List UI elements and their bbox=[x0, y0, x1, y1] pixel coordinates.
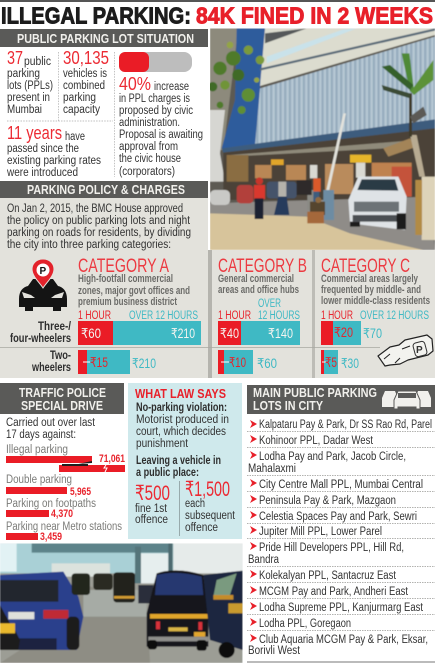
fine: 1,500 rupees subsequent offence: subsequent bbox=[185, 510, 236, 522]
bar: double parking 5,965: Double parking bbox=[6, 474, 72, 486]
black auto-rickshaw bbox=[147, 570, 208, 651]
stat: 11 years: were introduced bbox=[6, 167, 78, 179]
blue suv bbox=[0, 572, 83, 650]
policy intro text: parking on roads for residents, by dividing bbox=[7, 227, 191, 239]
stat: 11 years: passed since the bbox=[7, 143, 79, 155]
leaving a vehicle text bbox=[136, 455, 221, 479]
stat: 37 public parking lots: 37 bbox=[7, 48, 23, 68]
stat: 40 percent increase: the civic house bbox=[119, 153, 181, 165]
fine: 1,500 rupees subsequent offence: ₹1,500 bbox=[185, 478, 230, 501]
category a: zones, major govt offices and bbox=[78, 285, 190, 297]
fine: 500 rupees first offence: ₹500 bbox=[135, 482, 170, 505]
bar: category c three/four-wheelers: ₹20 bbox=[334, 325, 353, 340]
stat: 40 percent increase: proposed by civic bbox=[119, 105, 193, 117]
drive intro text: Carried out over last bbox=[6, 417, 96, 429]
row label: three-/four-wheelers: Three-/ bbox=[38, 321, 72, 333]
row label: three-/four-wheelers: four-wheelers bbox=[10, 333, 71, 345]
stat: 40 percent increase bbox=[119, 74, 203, 178]
row label: two-wheelers: wheelers bbox=[31, 362, 71, 374]
bar: illegal parking 71,061 bbox=[6, 444, 125, 472]
row label: three-/four-wheelers bbox=[10, 321, 72, 345]
leaving a vehicle text: a public place: bbox=[136, 467, 199, 479]
panel: public parking lot situation bbox=[0, 29, 208, 181]
policy intro text: the policy on public parking lots and night bbox=[7, 215, 191, 227]
category a: 1 HOUR bbox=[78, 310, 111, 322]
icon: hand holding parking ticket: P bbox=[416, 345, 423, 356]
list of parking lots: Peninsula Pay & Park, Mazgaon bbox=[259, 495, 396, 507]
bar: parking on footpaths 4,370: 4,370 bbox=[51, 508, 73, 520]
category a: OVER 12 HOURS bbox=[129, 310, 198, 322]
category b bbox=[218, 256, 307, 374]
list of parking lots: Pride Hill Developers PPL, Hill Rd, bbox=[259, 542, 404, 554]
category b: 1 HOUR bbox=[218, 310, 251, 322]
fine: 500 rupees first offence: offence bbox=[135, 514, 168, 526]
list of parking lots: Borivli West bbox=[248, 645, 301, 657]
no-parking violation text: punishment bbox=[136, 438, 189, 450]
bar: category b two-wheelers: ₹60 bbox=[257, 356, 277, 371]
heading: main public parking lots in city: MAIN PUBLIC PARKING bbox=[253, 385, 377, 400]
bar: category c three/four-wheelers bbox=[321, 321, 382, 345]
no-parking violation text: court, which decides bbox=[136, 426, 226, 438]
panel: parking policy and charges bbox=[0, 181, 435, 663]
fine: 1,500 rupees subsequent offence bbox=[185, 478, 236, 534]
icon: three cars bbox=[382, 391, 431, 409]
leaving a vehicle text: Leaving a vehicle in bbox=[136, 455, 221, 467]
drive intro text: 17 days against: bbox=[6, 429, 76, 441]
bar: parking near metro stations 3,459: Parking near Metro stations bbox=[6, 521, 122, 533]
category b: General commercial bbox=[218, 273, 294, 285]
category a: premium business district bbox=[78, 296, 177, 308]
bar: category c two-wheelers: ₹5 bbox=[325, 355, 337, 370]
stat: 11 years: existing parking rates bbox=[7, 155, 101, 167]
bar: illegal parking 71,061: 71,061 bbox=[99, 453, 125, 465]
title bbox=[1, 2, 433, 28]
stat: 30,135 vehicles capacity: capacity bbox=[63, 104, 100, 116]
stat: 40 percent increase: increase bbox=[154, 81, 189, 93]
fine: 500 rupees first offence: fine 1st bbox=[135, 503, 168, 515]
heading: main public parking lots in city: LOTS IN CITY bbox=[253, 398, 323, 413]
progress bar: 40 percent bbox=[119, 52, 192, 72]
parked motorbikes bbox=[210, 180, 312, 205]
bar: category c three/four-wheelers: ₹70 bbox=[363, 326, 382, 341]
stat: 40 percent increase: approval from bbox=[119, 141, 178, 153]
stat: 37 public parking lots bbox=[7, 48, 53, 116]
heading: parking policy and charges: PARKING POLICY & CHARGES bbox=[27, 182, 185, 197]
list of parking lots: MCGM Pay and Park, Andheri East bbox=[259, 586, 409, 598]
stat: 11 years bbox=[6, 123, 101, 179]
fine: 1,500 rupees subsequent offence: offence bbox=[185, 522, 218, 534]
white suv bbox=[348, 177, 407, 230]
bar: parking on footpaths 4,370: Parking on footpaths bbox=[6, 498, 96, 510]
stat: 40 percent increase: (corporators) bbox=[119, 166, 175, 178]
category b: 12 HOURS bbox=[258, 310, 300, 322]
list of parking lots: Lodha Pay and Park, Jacob Circle, bbox=[259, 451, 406, 463]
stat: 30,135 vehicles capacity: 30,135 bbox=[63, 48, 109, 68]
heading: traffic police special drive: SPECIAL DRIVE bbox=[21, 398, 103, 413]
stat: 37 public parking lots: public bbox=[24, 56, 51, 68]
category b: areas and office hubs bbox=[218, 284, 299, 296]
fine: 1,500 rupees subsequent offence: each bbox=[185, 498, 205, 510]
stat: 37 public parking lots: lots (PPLs) bbox=[7, 80, 53, 92]
stat: 30,135 vehicles capacity: vehicles is bbox=[63, 68, 107, 80]
bar: category c two-wheelers bbox=[321, 350, 359, 374]
bar: parking near metro stations 3,459 bbox=[6, 521, 122, 543]
policy intro text bbox=[7, 203, 191, 251]
stat: 30,135 vehicles capacity: parking bbox=[63, 92, 96, 104]
stat: 11 years: have bbox=[65, 131, 85, 143]
panel: traffic police special drive bbox=[0, 383, 125, 543]
heading: traffic police special drive bbox=[0, 383, 124, 414]
stat: 37 public parking lots: Mumbai bbox=[7, 104, 42, 116]
category a: High-footfall commercial bbox=[78, 273, 173, 285]
row label: two-wheelers bbox=[31, 350, 71, 374]
bar: category b three/four-wheelers bbox=[218, 321, 300, 345]
panel: what law says bbox=[128, 383, 242, 539]
stat: 30,135 vehicles capacity bbox=[63, 48, 109, 116]
stat: 40 percent increase: Proposal is awaiting bbox=[119, 129, 203, 141]
heading: traffic police special drive: TRAFFIC POLICE bbox=[19, 385, 106, 400]
bar: category b three/four-wheelers: ₹140 bbox=[268, 326, 293, 341]
bar: double parking 5,965 bbox=[6, 474, 91, 498]
panel: main public parking lots bbox=[247, 385, 435, 662]
bar: category b two-wheelers bbox=[218, 350, 277, 374]
list of parking lots: Lodha PPL, Goregaon bbox=[259, 618, 351, 630]
bar: double parking 5,965: 5,965 bbox=[70, 486, 91, 498]
people bbox=[254, 177, 325, 223]
tree bbox=[208, 42, 264, 114]
category b: OVER bbox=[258, 298, 281, 310]
bar: category a two-wheelers bbox=[78, 350, 156, 374]
stat: 40 percent increase: in PPL charges is bbox=[119, 93, 190, 105]
icon: car with parking pin bbox=[19, 259, 67, 311]
yellow auto left bbox=[0, 605, 20, 650]
drive intro text bbox=[6, 417, 96, 441]
fine: 500 rupees first offence bbox=[135, 482, 170, 526]
title: ILLEGAL PARKING: bbox=[1, 2, 191, 28]
stat: 37 public parking lots: present in bbox=[7, 92, 50, 104]
no-parking violation text: Motorist produced in bbox=[136, 414, 229, 426]
stat: 30,135 vehicles capacity: combined bbox=[63, 80, 105, 92]
palm bbox=[382, 53, 433, 137]
policy intro text: On Jan 2, 2015, the BMC House approved bbox=[7, 203, 183, 215]
bar: category c two-wheelers: ₹30 bbox=[341, 356, 359, 371]
list of parking lots: Mahalaxmi bbox=[248, 463, 296, 475]
photo: cars and auto-rickshaws in parking lot bbox=[0, 543, 243, 663]
category b: CATEGORY B bbox=[218, 256, 307, 277]
autos on right bbox=[203, 571, 243, 658]
distant autos bbox=[72, 572, 153, 603]
stat: 40 percent increase: 40% bbox=[119, 74, 151, 94]
bar: category a three/four-wheelers: ₹210 bbox=[171, 326, 195, 341]
heading: main public parking lots in city bbox=[247, 385, 435, 414]
panel: what law says: WHAT LAW SAYS bbox=[135, 386, 226, 401]
bar: parking on footpaths 4,370 bbox=[6, 498, 96, 520]
row label: two-wheelers: Two- bbox=[50, 350, 71, 362]
category c bbox=[321, 256, 433, 374]
stat: 37 public parking lots: parking bbox=[7, 68, 40, 80]
icon: car with parking pin: P bbox=[40, 266, 46, 277]
list of parking lots bbox=[248, 419, 432, 657]
bar: category b two-wheelers: ₹10 bbox=[229, 355, 246, 370]
bar: parking near metro stations 3,459: 3,459 bbox=[40, 531, 62, 543]
category a bbox=[78, 256, 201, 374]
photo: parking complex exterior bbox=[208, 28, 435, 250]
bar: illegal parking 71,061: Illegal parking bbox=[6, 444, 68, 456]
bar: category a two-wheelers: ₹210 bbox=[132, 356, 156, 371]
list of parking lots: Bandra bbox=[248, 554, 279, 566]
policy intro text: the city into three parking categories: bbox=[7, 239, 171, 251]
bar: category a two-wheelers: ₹15 bbox=[90, 355, 108, 370]
no-parking violation text: No-parking violation: bbox=[136, 402, 227, 414]
no-parking violation text bbox=[136, 402, 229, 450]
list of parking lots: Kohinoor PPL, Dadar West bbox=[259, 435, 374, 447]
bar: category a three/four-wheelers: ₹60 bbox=[81, 326, 101, 341]
stat: 11 years: 11 years bbox=[7, 123, 62, 143]
bar: category b three/four-wheelers: ₹40 bbox=[220, 326, 239, 341]
heading: public parking lot situation: PUBLIC PARKING LOT SITUATION bbox=[17, 31, 194, 46]
bar: category a three/four-wheelers bbox=[78, 321, 201, 345]
stat: 40 percent increase: administration. bbox=[119, 117, 180, 129]
category a: CATEGORY A bbox=[78, 256, 169, 277]
category c: 1 HOUR bbox=[321, 310, 353, 322]
list of parking lots: Jupiter Mill PPL, Lower Parel bbox=[259, 526, 382, 538]
list of parking lots: Kolekalyan PPL, Santacruz East bbox=[259, 570, 397, 582]
